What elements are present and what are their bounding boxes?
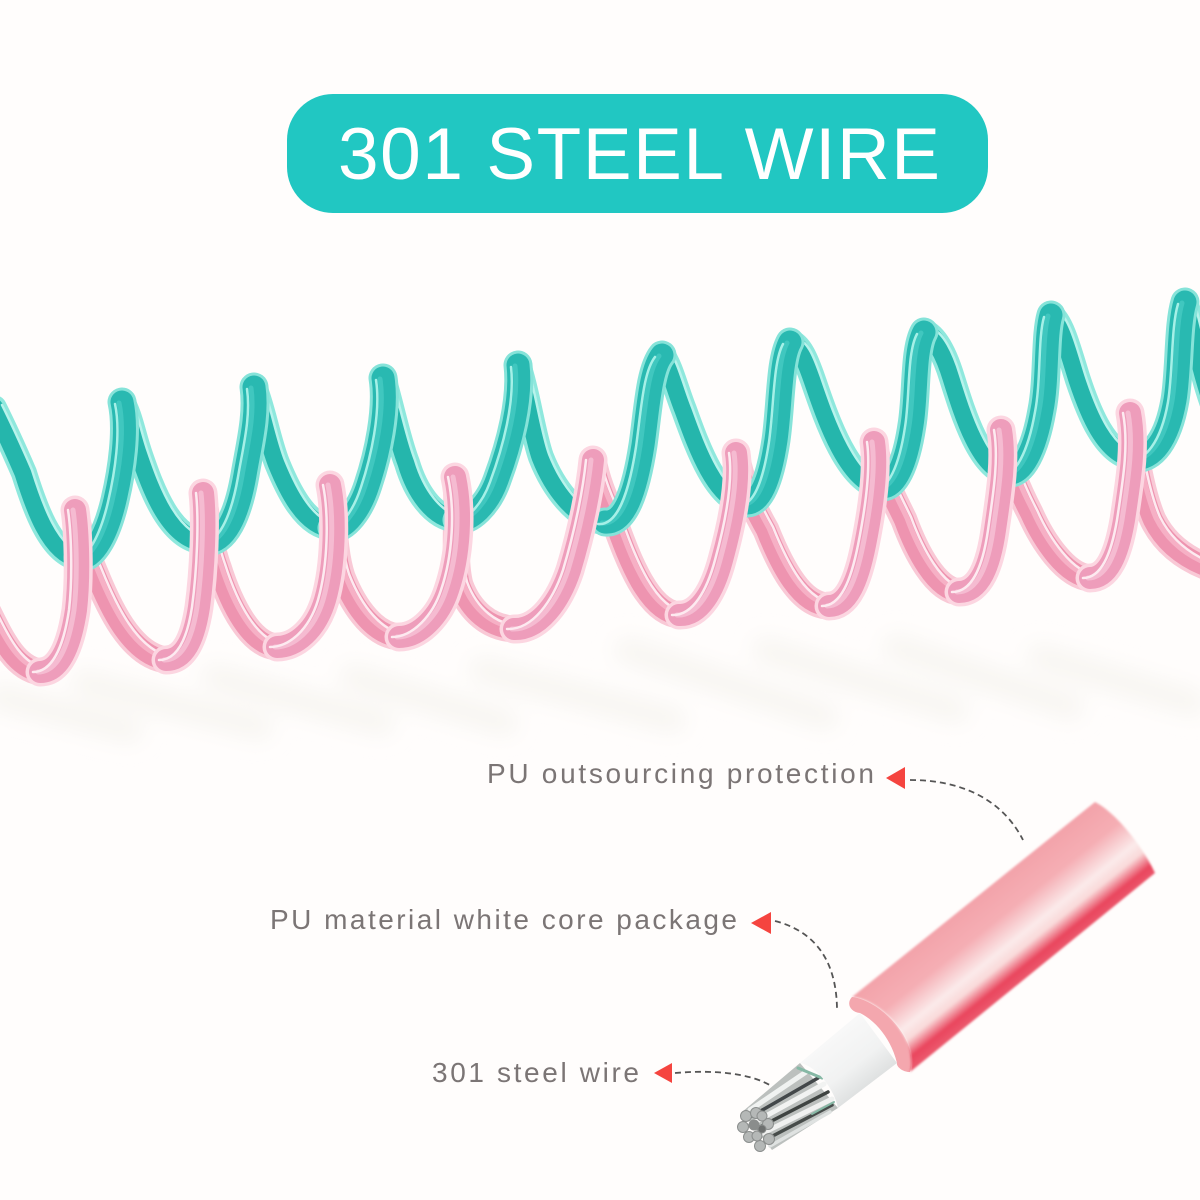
label: PU outsourcing protection: PU outsourcing protection (487, 758, 874, 789)
pink coil front strands (33, 413, 1132, 672)
coil shadow (0, 647, 1193, 730)
wire tip (738, 1108, 774, 1152)
teal coil front strands (71, 302, 1185, 560)
label: PU outsourcing protection (487, 758, 1023, 840)
title badge: 301 STEEL WIRE (338, 114, 940, 195)
label: PU material white core package: PU material white core package (270, 904, 737, 935)
steel strands (738, 1063, 838, 1152)
label: 301 steel wire (432, 1057, 773, 1088)
cable cross-section (738, 802, 1155, 1152)
spiral coil (0, 299, 1200, 672)
pink end face (849, 997, 912, 1072)
pink sheath (852, 802, 1155, 1072)
label: 301 steel wire: 301 steel wire (432, 1057, 639, 1088)
label: PU material white core package (270, 904, 837, 1008)
white core (800, 1013, 897, 1108)
pink coil back strands (0, 410, 1200, 672)
title badge (287, 94, 988, 213)
teal coil back strands (0, 299, 1200, 558)
